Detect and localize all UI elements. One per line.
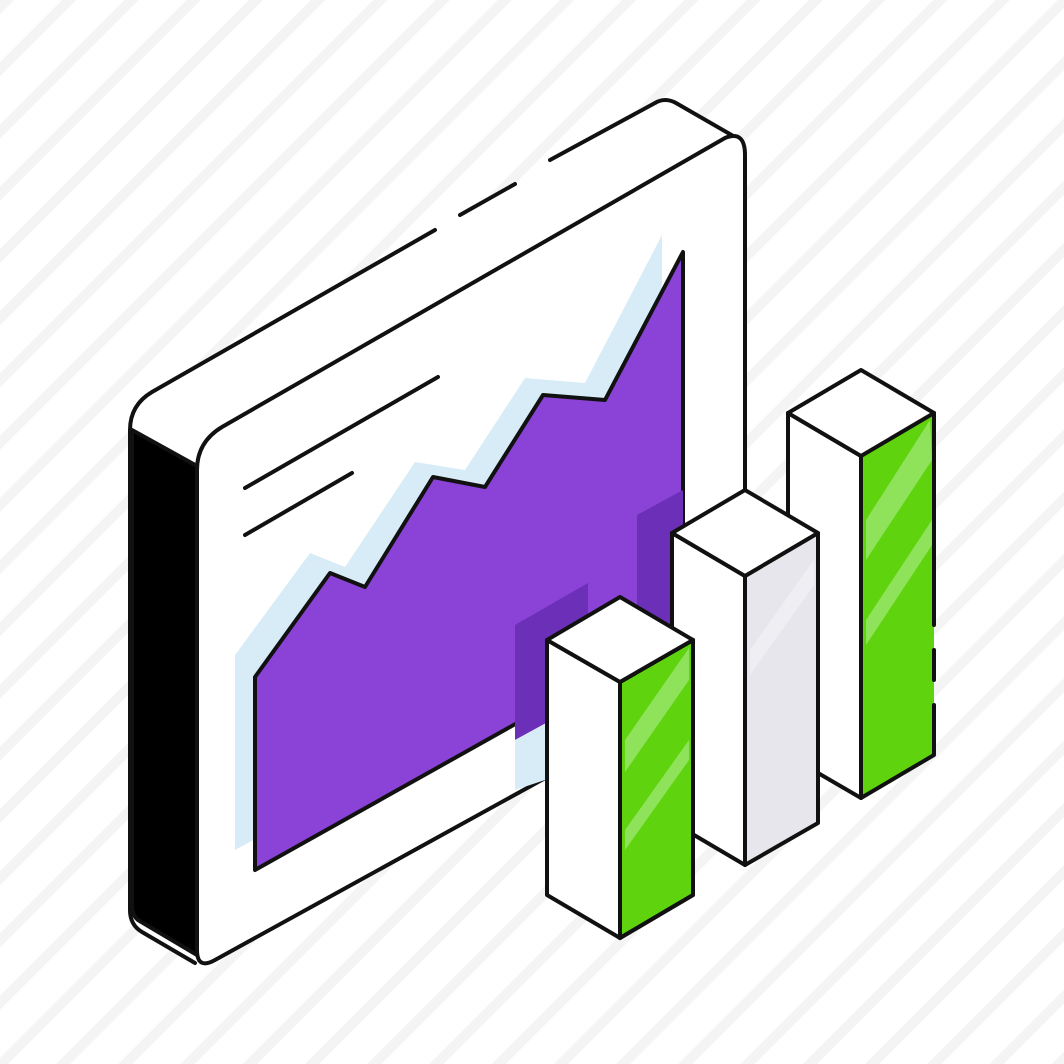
board: front face — [197, 136, 745, 963]
text lines on board — [245, 377, 438, 535]
board: side thickness — [130, 100, 745, 965]
bar 1 (front, green) — [547, 597, 693, 938]
bar 2 (middle, gray) — [672, 490, 818, 865]
bar 3 (right, green) — [788, 370, 934, 798]
area chart shadow — [235, 235, 662, 850]
area chart — [255, 252, 683, 870]
